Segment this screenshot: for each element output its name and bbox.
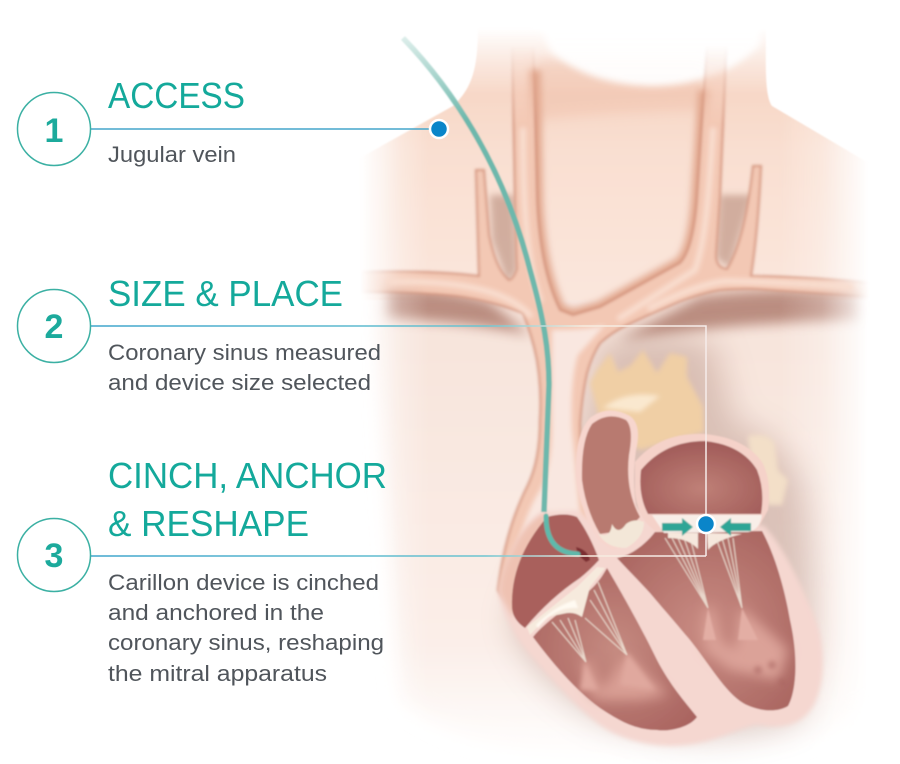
vessel network: jugular, subclavian and vena cava (366, 53, 864, 596)
chest background (377, 300, 856, 722)
text: sizing description: Coronary sinus measured (108, 340, 381, 365)
right atrium cavity (512, 514, 599, 628)
connector lines (91, 129, 706, 556)
diamond edge shading (535, 70, 704, 315)
pulmonary veins (748, 435, 788, 505)
catheter (403, 38, 549, 512)
left ventricle cavity (617, 531, 795, 710)
heading: cinch, anchor and reshape: & RESHAPE (108, 503, 309, 544)
marker: coronary sinus (697, 515, 715, 533)
shadow around heart (510, 335, 814, 738)
step 1 (18, 75, 245, 167)
neck pockets (490, 195, 752, 284)
heading: size and place: SIZE & PLACE (108, 273, 343, 314)
vena cava pale core (512, 325, 610, 610)
heart wall (500, 512, 821, 744)
right atrium wall accent (500, 513, 545, 618)
left ventricle chord base (703, 608, 758, 640)
mitral leaflets (668, 533, 742, 550)
text: sizing description: and device size selected (108, 370, 371, 395)
aorta highlight (603, 394, 660, 412)
chordae tendineae (552, 538, 742, 662)
left atrium (635, 434, 769, 532)
step 2 (18, 273, 381, 395)
tricuspid highlight (536, 600, 578, 628)
catheter in atrium (546, 516, 578, 554)
coronary sinus opening (576, 547, 590, 562)
left ventricle papillary muscles (705, 607, 788, 680)
number badge 1: 1 (45, 112, 63, 150)
left ventricle muscle spots (754, 661, 786, 686)
aortic valve cusps (598, 520, 644, 548)
heading: access: ACCESS (108, 75, 245, 116)
chin (530, 0, 760, 86)
number badge 2: 2 (45, 308, 63, 346)
left atrium cavity (640, 441, 762, 514)
aortic root cavity (582, 416, 640, 534)
aortic root chamber (576, 410, 644, 550)
tricuspid valve (527, 567, 605, 635)
anatomical illustration: torso and heart (360, 0, 885, 760)
shadows under clavicle veins (385, 288, 862, 340)
mitral annulus (652, 515, 762, 533)
vessel highlights (390, 130, 850, 318)
number badge 3: 3 (45, 537, 63, 575)
right ventricle papillary muscles (582, 655, 668, 700)
neck and shoulders (371, 36, 858, 299)
number badge 2 (18, 290, 90, 362)
right ventricle chord base (580, 652, 655, 690)
number badge 3 (18, 518, 90, 592)
aorta (590, 350, 704, 450)
chin shadow (535, 60, 704, 120)
cinching arrows (662, 518, 751, 536)
step 3 (18, 455, 387, 686)
text: jugular vein: Jugular vein (108, 142, 236, 167)
text: device description: Carillon device is cinched (108, 570, 379, 595)
text: device description: and anchored in the (108, 600, 324, 625)
text: device description: the mitral apparatus (108, 661, 327, 686)
right ventricle cavity (533, 568, 697, 730)
number badge 1 (18, 92, 90, 166)
text: device description: coronary sinus, reshaping (108, 630, 384, 655)
marker: jugular (430, 120, 448, 138)
heading: cinch, anchor and reshape: CINCH, ANCHOR (108, 455, 387, 496)
